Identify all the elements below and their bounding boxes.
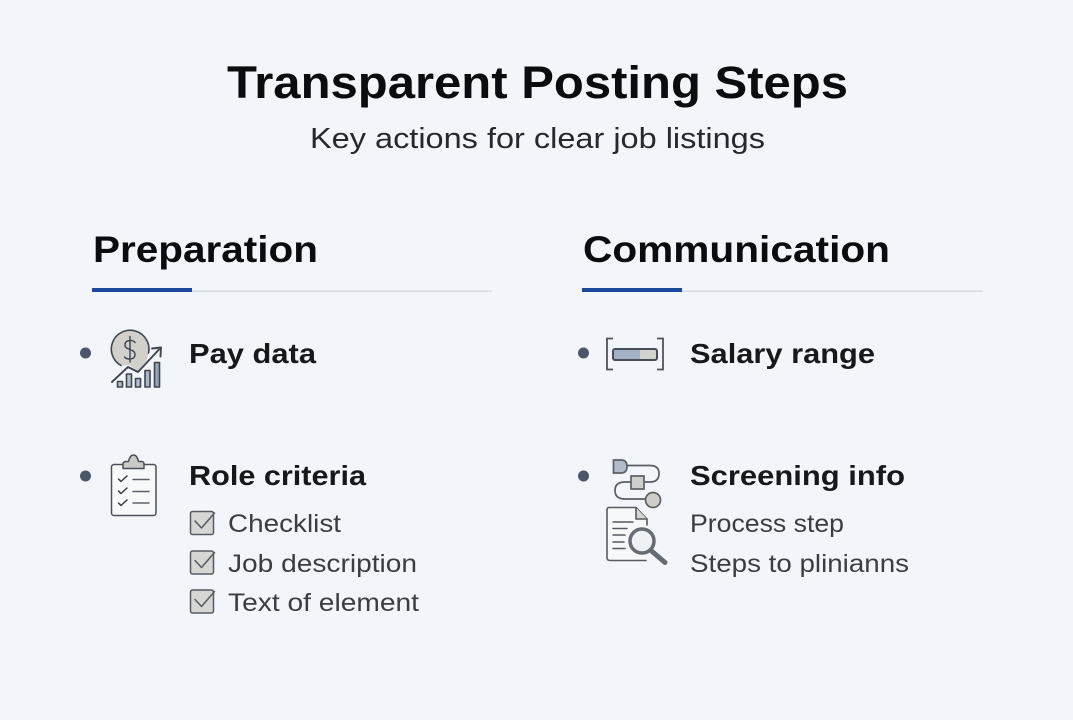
bullet: screening info [578,470,589,482]
icon: pay data coin and growth chart [111,330,161,387]
label: screening info: Screening info [690,460,905,491]
checkbox: job description [190,551,214,574]
panel: preparation [80,229,492,617]
bullet: role criteria [80,470,91,482]
heading: preparation: Preparation [93,229,318,270]
label: salary range: Salary range [690,338,875,369]
item: text of element: Text of element [228,589,419,617]
icon: document with magnifier [607,508,665,562]
item: steps to plinianns: Steps to plinianns [690,550,909,578]
label: role criteria: Role criteria [189,460,366,491]
bullet: pay data [80,348,91,358]
icon: process flow [614,460,660,508]
icon: clipboard checklist [112,455,156,516]
title: Transparent Posting Steps [227,57,848,108]
item: job description: Job description [228,550,417,578]
checkbox: text of element [190,590,214,613]
checkbox: checklist [190,512,214,534]
subtitle: Key actions for clear job listings [310,123,765,155]
icon: salary range bar in brackets [607,338,663,370]
item: checklist: Checklist [228,510,341,538]
item: process step: Process step [690,510,844,538]
label: pay data: Pay data [189,338,316,369]
bullet: salary range [578,348,589,358]
panel: communication [578,229,983,578]
heading: communication: Communication [583,229,890,270]
